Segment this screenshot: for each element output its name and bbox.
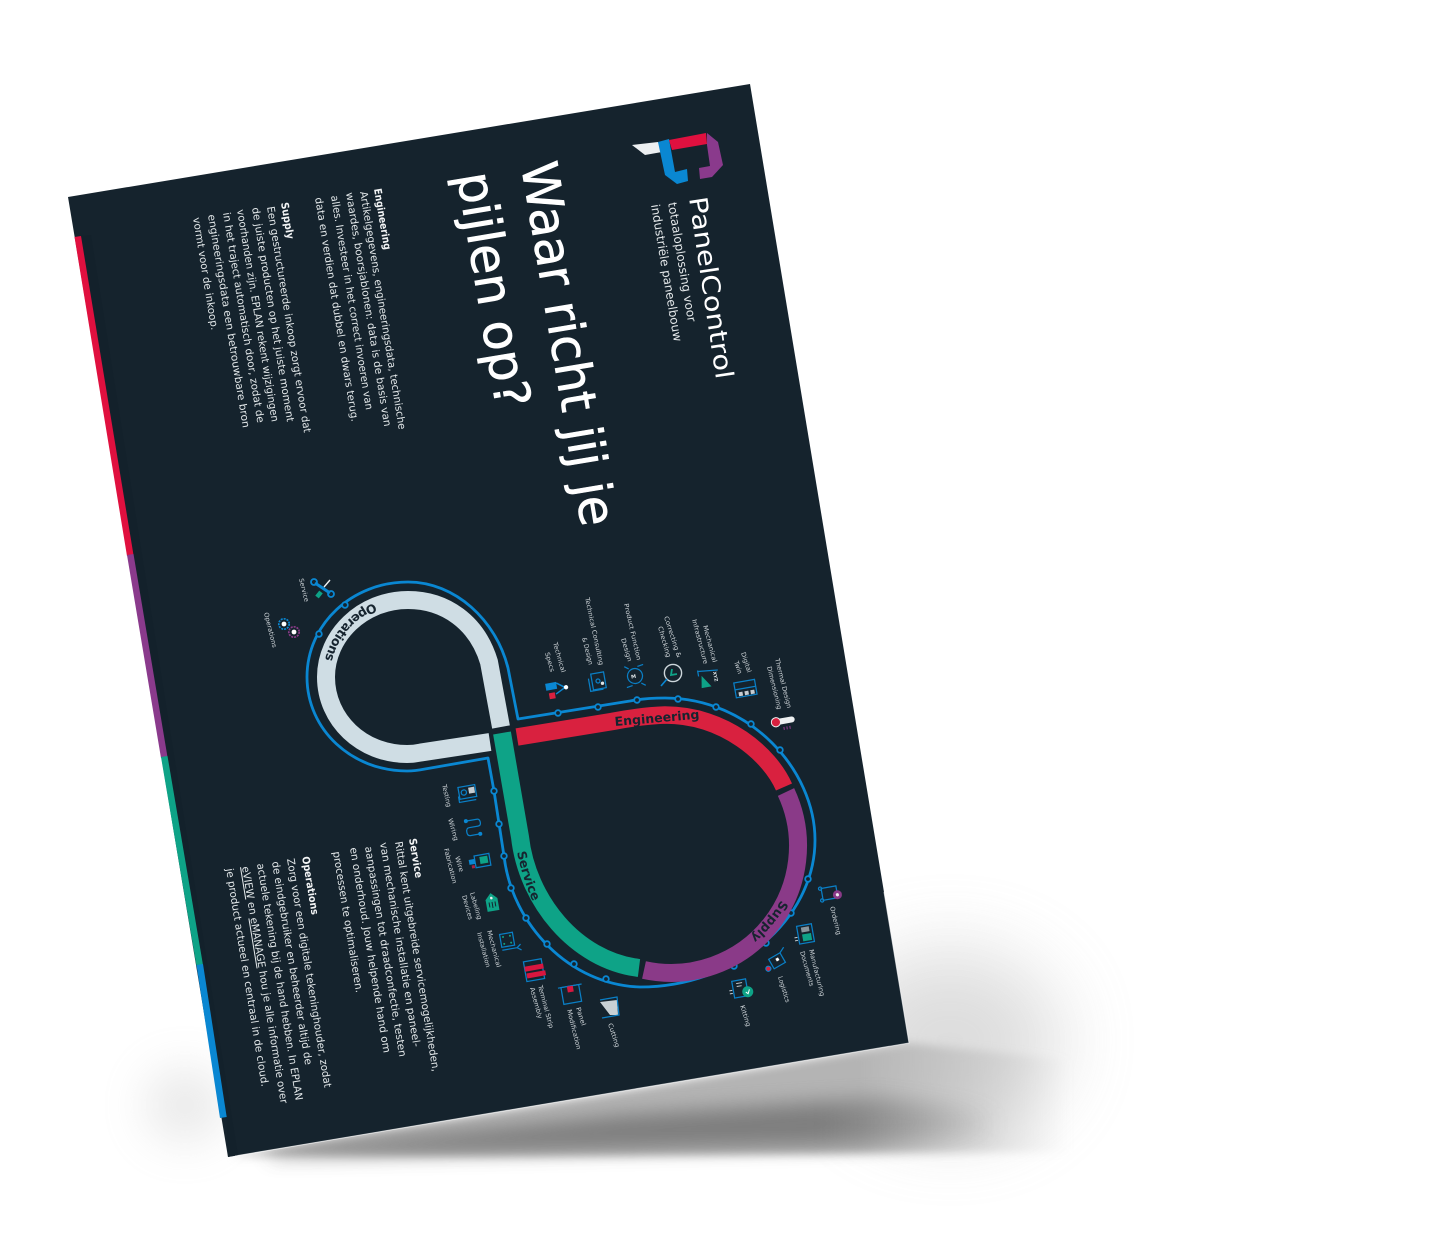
text block: service: en onderhoud. Jouw helpende hand om [347,847,392,1054]
infinity diagram [306,580,816,988]
icon: technical consulting [588,672,606,691]
outer blue track [307,582,815,987]
text block: operations: Zorg voor een digitale tekeninghouder, zodat [284,858,333,1088]
text block: service: Rittal kent uitgebreide servicemogelijkheden, [392,841,442,1072]
icon: product function design: M [631,674,637,681]
step labels: Product Function [622,603,643,661]
step labels: Ordering [828,906,843,936]
spine fold [81,235,238,1157]
text block: operations: de eindgebruiker en beheerder altijd de [269,861,314,1066]
step labels: Installation [475,931,492,968]
icon: cutting [600,997,619,1018]
band: supply [644,792,798,973]
brand tagline: totaaloplossing voor [665,201,699,323]
brand tagline: industriële paneelbouw [648,203,685,343]
step labels: Dimensioning [765,666,783,710]
step labels [262,578,843,1050]
step labels: Manufacturing [807,949,826,997]
band label: engineering: Engineering [614,707,700,729]
logo [632,133,723,184]
step labels: Fabrication [442,848,459,884]
title: pijlen op? [445,167,542,412]
text block: engineering [312,188,408,430]
text block: operations: Operations [299,856,321,916]
step labels: Service [297,578,311,603]
icon: terminal strip assembly [523,958,547,982]
step labels: Correcting & [662,615,683,659]
icon: testing [457,785,477,802]
text block: supply: de juiste producten op het juiste moment [249,207,296,423]
text block: service: van mechanische installatie en paneel- [377,842,422,1048]
icon: ordering [818,884,843,902]
text block: engineering: Artikelgegevens, engineeringsdata, technische [357,191,408,430]
text block: engineering: data en verdien dat dubbel en dwars terug. [312,197,361,423]
band label: supply: Supply [752,901,788,942]
step labels: Wire [453,855,465,873]
icon: digital twin [734,679,757,698]
icon: product function design [623,663,647,689]
text block: supply: Supply [278,202,296,240]
icon: kitting [728,978,754,1000]
text block: operations [223,856,333,1105]
text block: supply: vormt voor de inkoop. [190,217,220,331]
icon: logistics [761,947,791,973]
drop shadow [145,950,1070,1156]
icon: service tools [311,579,334,597]
band: engineering [517,715,784,787]
icon: manufacturing documents [793,924,814,945]
step labels: Labeling [468,891,483,920]
band: service [502,733,639,968]
text block: operations: eVIEW en eMANAGE hou je alle informatie over [239,866,290,1105]
band label: service: Service [518,852,538,900]
icon: mechanical infrastructure [698,667,720,688]
text block: supply: Een gestructureerde inkoop zorgt ervoor dat [264,206,313,433]
step labels: Assembly [528,986,544,1020]
icon: mechanical installation [500,931,522,953]
step labels: & Design [580,637,595,666]
text block: supply: voorhanden zijn. EPLAN rekent wijzigingen [234,209,281,423]
band: operations [326,600,501,754]
text block: engineering: alles. Investeer in het correct invoeren van [328,195,375,411]
text block: engineering: Engineering [371,188,393,251]
step labels: Documents [798,950,816,988]
step labels: Thermal Design [773,657,793,709]
icon: labeling devices [485,892,499,912]
page bottom edge highlight [235,892,909,1156]
spine colour stripes [74,236,227,1118]
text block: operations: actuele tekening bij de hand hebben. In EPLAN [254,863,305,1101]
text block: service: aanpassingen tot draadconfectie, testen [362,846,408,1058]
text block: service: processen te optimaliseren. [330,851,365,994]
text block: supply: in het traject automatisch door, zodat de [220,212,266,424]
icon: panel modification [558,984,585,1005]
icon: wiring [464,817,483,838]
step labels: Logistics [776,975,792,1004]
text block: service: Service [406,838,424,879]
step labels: Terminal Strip [536,983,555,1029]
text block: service [330,838,442,1072]
step labels: Devices [460,894,475,921]
text block: supply [190,202,313,433]
step labels: Specs [543,651,556,673]
band label: operations: Operations [326,604,376,661]
text block: supply: engineeringsdata een betrouwbare bron [205,214,252,429]
step labels: Design [619,637,634,663]
step labels: Twin [732,659,744,675]
step labels: Digital [739,651,753,674]
step labels: Wiring [446,817,460,842]
step labels: Panel [574,1006,588,1027]
step labels: Technical Consulting [583,596,605,666]
step labels: Operations [262,612,279,649]
step labels: Mechanical [485,929,503,968]
brochure page [68,84,909,1157]
icon: wire fabrication [468,853,491,869]
title [445,157,627,530]
title: Waar richt jij je [509,157,627,530]
step labels: Infrastructure [690,618,710,665]
track nodes [316,602,811,982]
step labels: Mechanical [701,624,719,663]
step labels: Testing [440,783,453,808]
step labels: Technical [551,640,567,674]
brand name: PanelControl [683,195,739,381]
icon: operations gears [279,619,299,637]
text block: operations: je product actueel en centraal in de cloud. [223,867,271,1088]
icon: technical specs [545,680,570,700]
step labels: Kitting [738,1004,753,1028]
step labels: Checking [656,625,673,658]
text block: engineering: waardes, boorsjablonen: data is de basis van [343,192,393,427]
icon: mechanical infrastructure: XYZ [711,671,719,683]
step labels: Cutting [606,1022,621,1048]
icon: correcting and checking [661,664,682,686]
icon: thermal design [771,714,796,732]
step labels: Modification [565,1009,583,1050]
